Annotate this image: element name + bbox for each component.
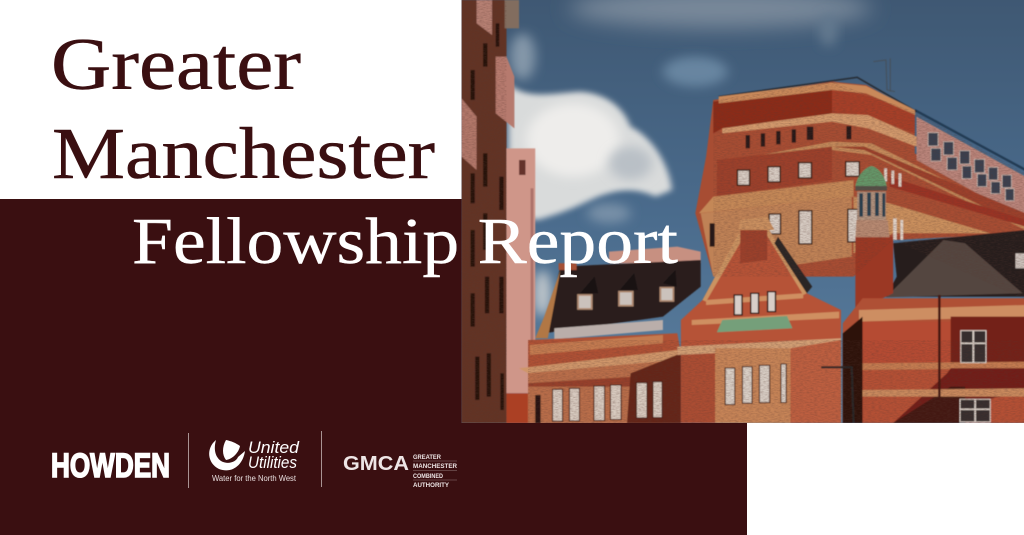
- main tower: [695, 58, 1024, 277]
- logo: GMCA: MANCHESTER: [413, 464, 458, 470]
- low wing slate roof: [535, 260, 701, 339]
- title: Greater Manchester: Greater: [51, 24, 301, 106]
- logo: GMCA: GREATER: [413, 455, 442, 461]
- logo: United Utilities: [209, 439, 300, 483]
- brick texture overlay: [462, 0, 1024, 423]
- logo: Howden: HOWDEN: [51, 447, 170, 485]
- low wing brick facade: [519, 333, 681, 423]
- logo: GMCA: COMBINED: [413, 474, 444, 480]
- distant building behind roofline: [609, 247, 701, 263]
- icon: United Utilities swoosh: [209, 440, 245, 470]
- panel: maroon block: [0, 199, 747, 535]
- sky: [462, 0, 1024, 423]
- right wing with slate roof: [843, 230, 1024, 423]
- left brick building: [462, 0, 519, 423]
- title: Greater Manchester: Manchester: [52, 113, 435, 194]
- subtitle: Fellowship Report: Fellowship Report: [132, 205, 678, 278]
- distant pink tower: [506, 148, 535, 423]
- photo: Manchester red-brick building against sky: [462, 0, 1024, 423]
- logo: United Utilities: Utilities: [248, 454, 297, 472]
- divider: [188, 433, 189, 488]
- logo: GMCA: GMCA: [343, 453, 409, 475]
- logo: United Utilities: United: [248, 439, 300, 457]
- divider: [321, 431, 322, 487]
- clouds: [508, 0, 872, 317]
- street lamp: [821, 367, 854, 423]
- logo: GMCA: AUTHORITY: [413, 483, 449, 489]
- green cupola: [855, 166, 890, 237]
- logo: United Utilities: Water for the North West: [212, 474, 297, 483]
- title: Greater Manchester: [51, 24, 435, 194]
- central gable and bay: [677, 217, 841, 423]
- buildings: [462, 0, 1024, 423]
- logo: GMCA: [343, 453, 458, 489]
